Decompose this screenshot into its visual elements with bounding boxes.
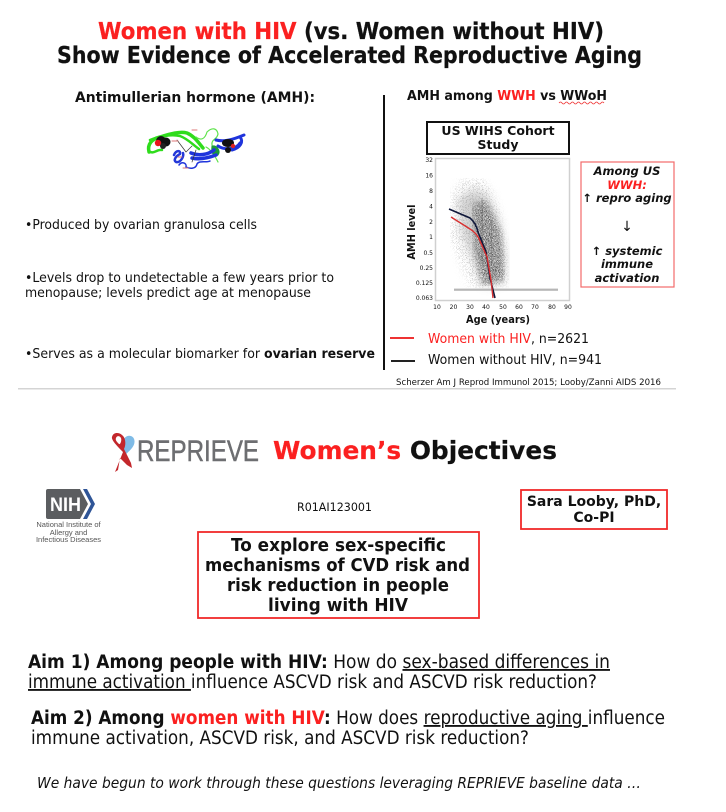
callout: among US WWH: ↑ repro aging [582, 191, 672, 205]
logo: NIH NIAID [36, 489, 102, 544]
box: US WIHS Cohort Study: US WIHS Cohort [441, 123, 555, 138]
citation: Scherzer Am J Reprod Immunol 2015; Looby/Zanni AIDS 2016 [396, 378, 661, 388]
chart curve: women with HIV [451, 217, 493, 298]
callout: among US WWH: WWH: [607, 178, 647, 192]
x axis labels: 70 [531, 304, 539, 311]
heading: Antimullerian hormone: Antimullerian hormone (AMH): [75, 90, 315, 106]
panel: AMH chart section [390, 88, 674, 388]
callout: among US WWH: ↑ systemic [592, 244, 663, 258]
x axis labels [433, 304, 572, 311]
logo wordmark: REPRIEVE [137, 435, 259, 468]
y axis labels: 16 [425, 172, 433, 180]
vertical divider [383, 95, 385, 370]
box: objective: mechanisms of CVD risk and [205, 555, 470, 576]
x axis labels: 20 [450, 304, 457, 311]
callout: among US WWH: immune [601, 257, 653, 271]
box: objective: risk reduction in people [227, 575, 449, 596]
callout: among US WWH: ↓ [621, 219, 633, 235]
x axis labels: 50 [499, 304, 507, 311]
y axis labels: 1 [429, 234, 433, 241]
box: objective: living with HIV [268, 595, 408, 616]
callout: among US WWH: activation [595, 271, 659, 285]
logo: NIH NIAID: Allergy and [50, 528, 87, 537]
title [57, 19, 642, 69]
box: US WIHS Cohort Study: Study [478, 137, 518, 152]
box: Sara Looby: Sara Looby, PhD, [527, 494, 661, 510]
x axis labels: 40 [482, 304, 490, 311]
y axis labels: 0.063 [416, 295, 433, 302]
heading: REPRIEVE Women's Objectives [112, 433, 557, 472]
y axis labels: 4 [429, 204, 433, 210]
x axis labels: 90 [564, 304, 572, 311]
icon: AMH protein structure [149, 129, 244, 168]
x axis labels: 60 [515, 304, 523, 311]
y axis labels [416, 157, 433, 302]
logo: NIH NIAID: National Institute of [36, 520, 102, 529]
aim 1: immune activation influence ASCVD risk and ASCVD risk reduction? [28, 672, 597, 693]
aim 2: immune activation, ASCVD risk, and ASCVD risk reduction? [31, 728, 529, 749]
box: objective [198, 532, 479, 618]
x axis labels: 80 [548, 304, 556, 311]
box: objective: To explore sex-specific [231, 535, 446, 556]
aim 1: Aim 1) Among people with HIV: How do sex-based differences in [28, 652, 610, 673]
bullet: levels drop [25, 271, 334, 301]
closing note: We have begun to work through these questions leveraging REPRIEVE baseline data … [37, 774, 641, 792]
y axis labels: 2 [429, 219, 433, 226]
y axis labels: 8 [429, 188, 433, 195]
x axis labels: 10 [433, 304, 441, 311]
grant number: R01AI123001 [297, 500, 372, 514]
title: Women with HIV (vs. Women without HIV) [98, 19, 604, 45]
y axis labels: 0.5 [423, 250, 433, 257]
title: Show Evidence of Accelerated Reproductive Aging [57, 43, 642, 69]
y axis labels: 32 [425, 157, 433, 164]
aim 2: Aim 2) Among women with HIV: How does reproductive aging influence [31, 708, 665, 729]
x axis title: Age (years) [466, 314, 530, 326]
logo: NIH NIAID: NIH [50, 495, 81, 516]
heading: AMH among WWH vs WWoH: AMH among WWH vs WWoH [407, 88, 607, 104]
y axis labels: 0.125 [416, 280, 433, 287]
panel: AMH description [25, 90, 375, 362]
box: Sara Looby: Co-PI [573, 510, 615, 526]
y axis title: AMH level [406, 204, 418, 260]
legend: Women without HIV, n=941 [428, 352, 602, 368]
callout: among US WWH [581, 162, 674, 287]
legend [390, 331, 602, 368]
x axis labels: 30 [466, 304, 474, 311]
bullet: levels drop: menopause; levels predict age at menopause [25, 286, 311, 301]
icon: red ribbon with heart [112, 433, 135, 472]
heading: REPRIEVE Women's Objectives: Women’s Objectives [273, 436, 557, 465]
bullet: levels drop: •Levels drop to undetectable a few years prior to [25, 271, 334, 286]
logo: NIH NIAID: Infectious Diseases [36, 535, 101, 544]
box: Sara Looby [521, 490, 667, 529]
chart curve: women without HIV [449, 209, 495, 298]
bullet: produced by granulosa cells: •Produced by ovarian granulosa cells [25, 218, 257, 233]
bullet: molecular biomarker: •Serves as a molecular biomarker for ovarian reserve [25, 347, 375, 362]
aim 2 [31, 708, 665, 749]
scatter chart: AMH level by age [406, 157, 572, 326]
y axis labels: 0.25 [420, 265, 433, 272]
box: US WIHS Cohort Study [427, 122, 569, 154]
legend: Women with HIV, n=2621 [428, 331, 589, 347]
aim 1 [28, 652, 610, 693]
callout: among US WWH: Among US [593, 164, 660, 178]
